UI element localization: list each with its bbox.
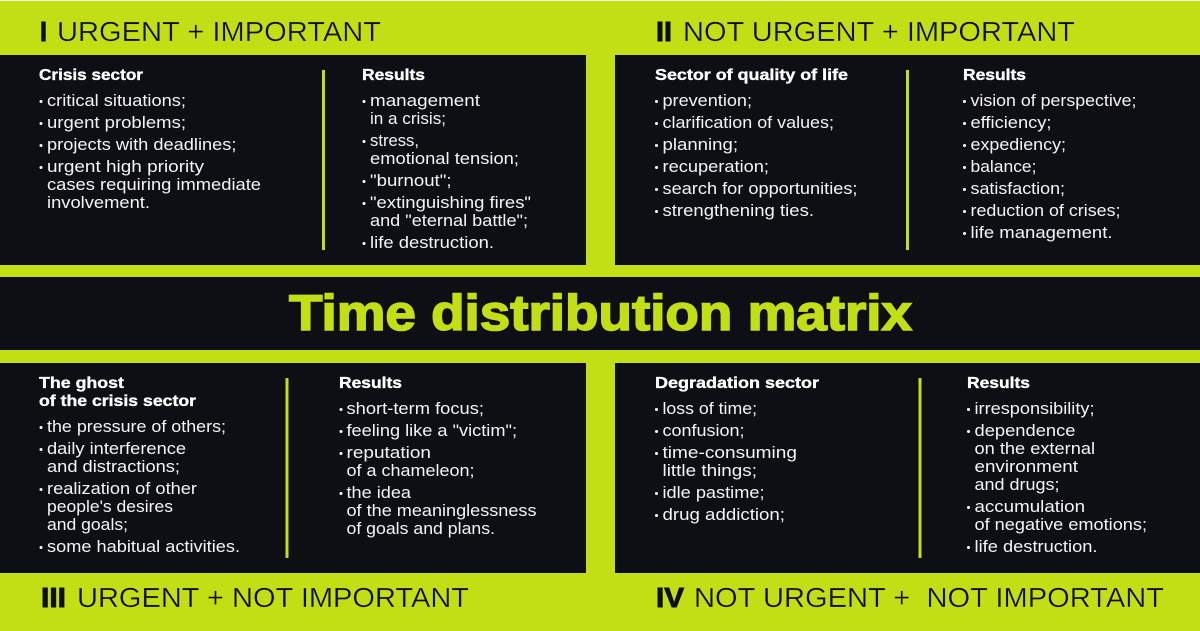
title: Time distribution matrix (289, 285, 912, 341)
column: crisis sector list (39, 67, 261, 212)
column: crisis results: Results (362, 67, 425, 84)
column: degradation results: and drugs; (974, 475, 1060, 494)
column: quality of life list: recuperation; (662, 157, 769, 176)
column: degradation results: accumulation (974, 497, 1085, 516)
column: ghost of the crisis list: and distractions; (47, 457, 180, 476)
column: degradation list: idle pastime; (662, 483, 764, 502)
column: quality of life list: planning; (662, 135, 738, 154)
column: quality of life list: prevention; (662, 91, 752, 110)
panel: sector of quality of life (615, 55, 1200, 265)
column: ghost of the crisis results: of a chameleon; (346, 461, 474, 480)
column: degradation results (967, 375, 1147, 556)
column: quality of life list: search for opportunities; (662, 179, 858, 198)
column: crisis sector list: cases requiring immediate (47, 175, 261, 194)
panel: degradation sector (615, 363, 1200, 573)
column: ghost of the crisis list: the pressure of others; (47, 417, 226, 436)
column: degradation list: confusion; (662, 421, 744, 440)
column: crisis results: emotional tension; (370, 149, 519, 168)
column: degradation results: life destruction. (974, 537, 1098, 556)
heading: quadrant III: III (41, 582, 66, 613)
column: ghost of the crisis results (339, 375, 536, 538)
column: crisis sector list: Crisis sector (39, 67, 143, 84)
column: quality of life results: efficiency; (970, 113, 1052, 132)
column: degradation results: environment (974, 457, 1078, 476)
column: ghost of the crisis list: The ghost (39, 375, 124, 392)
column: crisis results: "extinguishing fires" (370, 193, 531, 212)
column: crisis results: stress, (370, 131, 419, 150)
column: quality of life results: expediency; (970, 135, 1066, 154)
column: degradation list: Degradation sector (655, 375, 819, 392)
column: quality of life list (655, 67, 858, 220)
column: ghost of the crisis results: Results (339, 375, 402, 392)
heading: quadrant IV: NOT URGENT + NOT IMPORTANT (694, 582, 1164, 613)
heading: quadrant I: I (40, 16, 47, 47)
column: ghost of the crisis results: short-term focus; (346, 399, 484, 418)
column: ghost of the crisis results: reputation (346, 443, 431, 462)
column: quality of life results: balance; (970, 157, 1036, 176)
column: ghost of the crisis results: feeling like a "victim"; (346, 421, 517, 440)
column: ghost of the crisis list: realization of other (47, 479, 197, 498)
column: degradation results: irresponsibility; (974, 399, 1094, 418)
column: quality of life results: satisfaction; (970, 179, 1065, 198)
column: crisis sector list: critical situations; (47, 91, 186, 110)
column: crisis results: life destruction. (370, 233, 494, 252)
column: degradation results: on the external (974, 439, 1095, 458)
column: quality of life results: vision of perspective; (970, 91, 1136, 110)
column: quality of life results: reduction of crises; (970, 201, 1120, 220)
column: ghost of the crisis results: of goals and plans. (346, 519, 495, 538)
column: degradation list: little things; (662, 461, 757, 480)
column: ghost of the crisis results: of the meaninglessness (346, 501, 536, 520)
heading: quadrant II: NOT URGENT + IMPORTANT (683, 16, 1075, 47)
column: degradation results: Results (967, 375, 1030, 392)
column: degradation list: loss of time; (662, 399, 757, 418)
column: crisis sector list: urgent problems; (47, 113, 186, 132)
panel: ghost of the crisis sector (0, 363, 586, 573)
column: quality of life results (963, 67, 1136, 242)
column: degradation results: of negative emotions; (974, 515, 1147, 534)
column: degradation list (655, 375, 819, 524)
column: quality of life results: life management. (970, 223, 1112, 242)
column: crisis sector list: involvement. (47, 193, 150, 212)
heading: quadrant III: URGENT + NOT IMPORTANT (77, 582, 469, 613)
column: crisis results: management (370, 91, 480, 110)
column: quality of life list: strengthening ties. (662, 201, 814, 220)
column: ghost of the crisis list: people's desires (47, 497, 173, 516)
column: crisis results (362, 67, 531, 252)
column: quality of life list: Sector of quality of life (655, 67, 848, 84)
heading: quadrant II: II (656, 16, 672, 47)
column: crisis results: "burnout"; (370, 171, 452, 190)
heading: quadrant IV: IV (656, 582, 684, 613)
heading: quadrant I: URGENT + IMPORTANT (57, 16, 381, 47)
column: ghost of the crisis list: some habitual activities. (47, 537, 240, 556)
column: degradation results: dependence (974, 421, 1076, 440)
column: crisis results: and "eternal battle"; (370, 211, 528, 230)
column: degradation list: drug addiction; (662, 505, 785, 524)
column: crisis sector list: urgent high priority (47, 157, 205, 176)
title band (0, 277, 1200, 350)
panel: crisis sector (0, 55, 586, 265)
column: ghost of the crisis list (39, 375, 240, 556)
column: crisis results: in a crisis; (370, 109, 446, 128)
column: ghost of the crisis results: the idea (346, 483, 412, 502)
column: ghost of the crisis list: and goals; (47, 515, 128, 534)
column: ghost of the crisis list: daily interference (47, 439, 186, 458)
column: ghost of the crisis list: of the crisis sector (39, 393, 196, 410)
column: quality of life list: clarification of values; (662, 113, 834, 132)
column: degradation list: time-consuming (662, 443, 797, 462)
column: quality of life results: Results (963, 67, 1026, 84)
column: crisis sector list: projects with deadlines; (47, 135, 236, 154)
